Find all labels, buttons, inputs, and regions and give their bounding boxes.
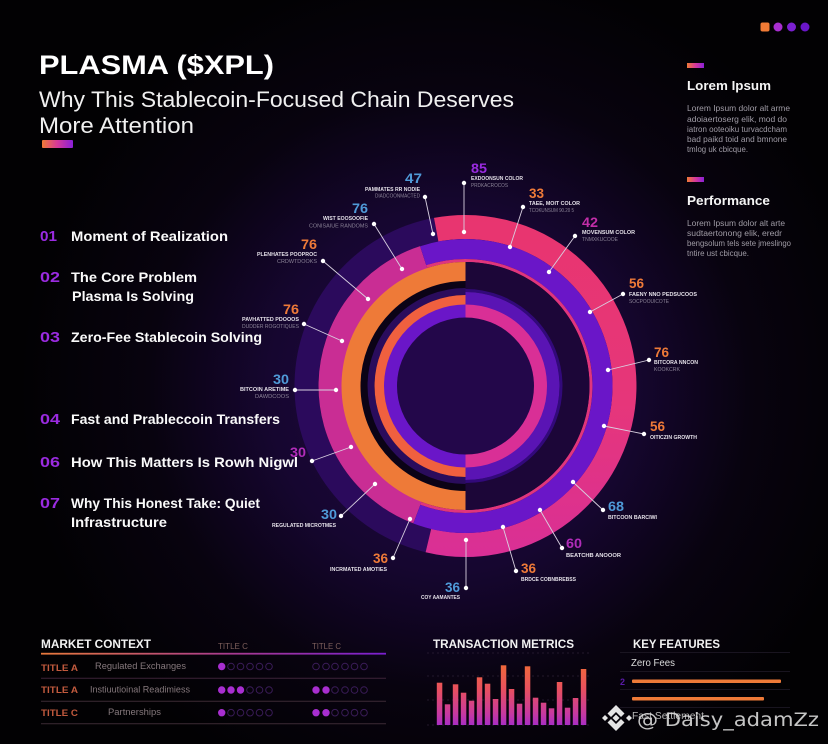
callout 42: TNMXKUCOOE [582,237,618,243]
inner disc [396,316,536,456]
column headers: TITLE C [312,641,341,651]
callout 76 right [606,344,698,373]
callout 36 orange left: 36 [373,550,388,566]
side panel: Lorem Ipsum: Lorem Ipsum dolor alt arme [687,103,790,113]
side panel: Performance: Lorem Ipsum dolor alt arte [687,218,785,228]
callout 76 blue: CONISAIUE RANDOMS [309,224,368,230]
ring: purple [417,249,602,523]
callout 60 [538,508,621,559]
title block [39,50,514,148]
item 06: How This Matters Is Rowh Nigwl [71,454,298,470]
item 03: Zero-Fee Stablecoin Solving [71,329,262,345]
callout 56 upper: 56 [629,275,644,291]
callout 56 upper: SOCPOOUICOTE [629,299,669,305]
callout 36 blue: COY AAMANTES [421,595,460,601]
watermark [602,705,819,731]
side panel: Performance: tntire ust cbicque. [687,248,749,258]
callout 30 blue lower [272,482,377,529]
callout 56 upper: FAENY NNO PEDSUCOOS [629,292,697,298]
item 01: 01 [40,228,57,245]
callout 33 [508,185,580,249]
item 02: The Core Problem [71,269,197,285]
ring: inner magenta right half [466,311,540,461]
callout 85 [462,160,523,234]
callout 30 blue upper: BITCOIN ARETIME [240,387,289,393]
item 06: 06 [40,454,60,471]
callout 76 orange lower: 76 [283,301,299,317]
callout 56 upper [588,275,697,314]
callout 76 right: KOOKCRK [654,367,680,373]
callout 47: PAMMATES RR NODIE [365,187,420,193]
callout 68 [571,480,657,521]
callout 33: TAEE, MOIT COLOR [529,201,580,207]
inner dark fill: left half [352,272,466,500]
callout 76 blue: 76 [352,200,368,216]
callout 36 orange right: BRDCE COBNBREBSS [521,577,576,583]
row 1: Regulated Exchanges [95,661,187,671]
panel: transaction metrics [427,637,590,725]
callout 42 [547,214,635,274]
row 1: TITLE A [41,663,78,674]
side panel: Performance: Performance [687,194,770,208]
panel: market context [41,637,386,724]
ring: inner coral half [380,300,466,472]
callout 36 orange left: INCRMATED AMOTIES [330,567,387,573]
title: PLASMA ($XPL) [39,50,274,80]
column headers: TITLE C [218,641,248,651]
callout 76 orange lower: PAVHATTED PDOOOS [242,317,299,323]
ring: left magenta [331,258,424,512]
feature bar 2 [632,697,764,700]
callout 47: 47 [405,170,422,186]
subtitle: More Attention [39,113,194,138]
callout 30 magenta [290,444,353,463]
callout 47 [365,170,435,236]
item 07: Infrastructure [71,514,167,530]
callout 68: BITCOON BARCIWI [608,515,657,521]
callout 30 blue upper: DAWDCOOS [255,394,289,400]
callout 42: MOVENSUM COLOR [582,230,635,236]
callout 60: BEATCHB ANOOOR [566,553,621,559]
callout 30 magenta: 30 [290,444,306,460]
row 3: Partnerships [108,707,162,717]
side panel: Performance: sudtaertonong elik, eredr [687,228,782,238]
item 01: Moment of Realization [71,228,228,244]
callout 33: 33 [529,185,544,201]
item 04: Fast and Prableccoin Transfers [71,411,280,427]
bar chart [437,665,586,725]
row 3: TITLE C [41,708,78,719]
ring: thin pink [421,260,591,511]
item 04: 04 [40,411,61,428]
chapter list [40,228,298,530]
item 07 [40,495,260,530]
callout 36 orange left [330,517,412,573]
item 07: Why This Honest Take: Quiet [71,495,260,511]
callout 68: 68 [608,498,624,514]
side panel: Lorem Ipsum: bad paikd toid and bmnone [687,134,787,144]
top right colour dots [760,22,810,32]
callout 30 blue upper: 30 [273,371,289,387]
callout 30 blue lower: 30 [321,506,337,522]
callout 76 orange upper [257,236,370,301]
transaction metrics heading: TRANSACTION METRICS [433,637,574,651]
ring: dark outer segment [306,230,436,541]
item 07: 07 [40,495,60,512]
callout 85: EXDOONSUN COLOR [471,176,523,182]
callout 76 orange upper: PLENHATES POOPROC [257,252,317,258]
callout 36 orange right [501,525,576,583]
feature: zero fees: Zero Fees [631,658,675,669]
callout 30 blue upper [240,371,338,400]
callout 60: 60 [566,535,582,551]
callout 56 lower: OITICZIN GROWTH [650,435,697,441]
callout 56 lower [602,418,697,441]
item 02: 02 [40,269,60,286]
row 1 [41,661,367,674]
callout 76 right: BITCORA NNCON [654,360,698,366]
callout 85: PRDKACROCOS [471,183,508,189]
accent bar [42,140,73,148]
side panel: Lorem Ipsum: Lorem Ipsum [687,79,771,93]
ring: right shadow band [466,290,561,482]
side panel: Lorem Ipsum: tmlog uk cbicque. [687,144,748,154]
ring: orange half [351,272,466,500]
feature bar 1 [632,680,781,683]
watermark handle: @ Daisy_adamZz [637,709,819,731]
callout 42: 42 [582,214,598,230]
callout 36 blue [421,538,468,601]
item 03: 03 [40,329,60,346]
row 2: TITLE A [41,685,78,696]
side panel: Performance [687,177,791,258]
callout 76 blue: WIST EOOSOOFIE [323,216,368,222]
callout 33: TCOKUNSUM 90.20 5 [529,208,574,214]
ring: left shadow band [371,292,466,480]
icon: diamond logo [602,705,632,731]
item 02 [40,269,197,304]
market context heading: MARKET CONTEXT [41,637,152,651]
row 3 [41,707,367,719]
ring: outer pink [428,227,624,545]
chart callouts [240,160,698,601]
callout 76 orange lower [242,301,344,343]
callout 76 blue [309,200,404,271]
callout 85: 85 [471,160,487,176]
row 2: Instiuutioinal Readimiess [90,684,190,694]
feature: fast settlement: Fast Settlement [632,711,704,722]
side panel: Lorem Ipsum [687,63,790,154]
radial ring chart [306,227,624,545]
subtitle: Why This Stablecoin-Focused Chain Deserves [39,87,514,112]
key features heading: KEY FEATURES [633,637,720,651]
callout 56 lower: 56 [650,418,665,434]
callout 47: DIADCOONMACTED [375,194,420,200]
side panel: Lorem Ipsum: iatron ooteoiku turvacdcham [687,124,787,134]
feature index: 2 [620,677,625,687]
panel: key features [620,637,790,722]
ring: inner purple right half [466,298,553,474]
side panel: Performance: bengsolum tels sete jmeslingo [687,238,791,248]
callout 76 orange upper: CRDWTDOOKS [277,259,317,265]
callout 36 blue: 36 [445,579,460,595]
column headers [218,641,341,651]
side panel: Lorem Ipsum: adoiaertoserg elik, mod do [687,114,787,124]
ring: inner purple left half [391,311,466,461]
callout 76 orange upper: 76 [301,236,317,252]
row 2 [41,684,367,696]
callout 30 blue lower: REGULATED MICROTMES [272,523,336,529]
callout 76 orange lower: DUDDER ROGOTIQUES [242,324,299,330]
inner dark fill: right half [466,262,590,510]
callout 36 orange right: 36 [521,560,536,576]
callout 76 right: 76 [654,344,669,360]
item 02: Plasma Is Solving [72,288,194,304]
